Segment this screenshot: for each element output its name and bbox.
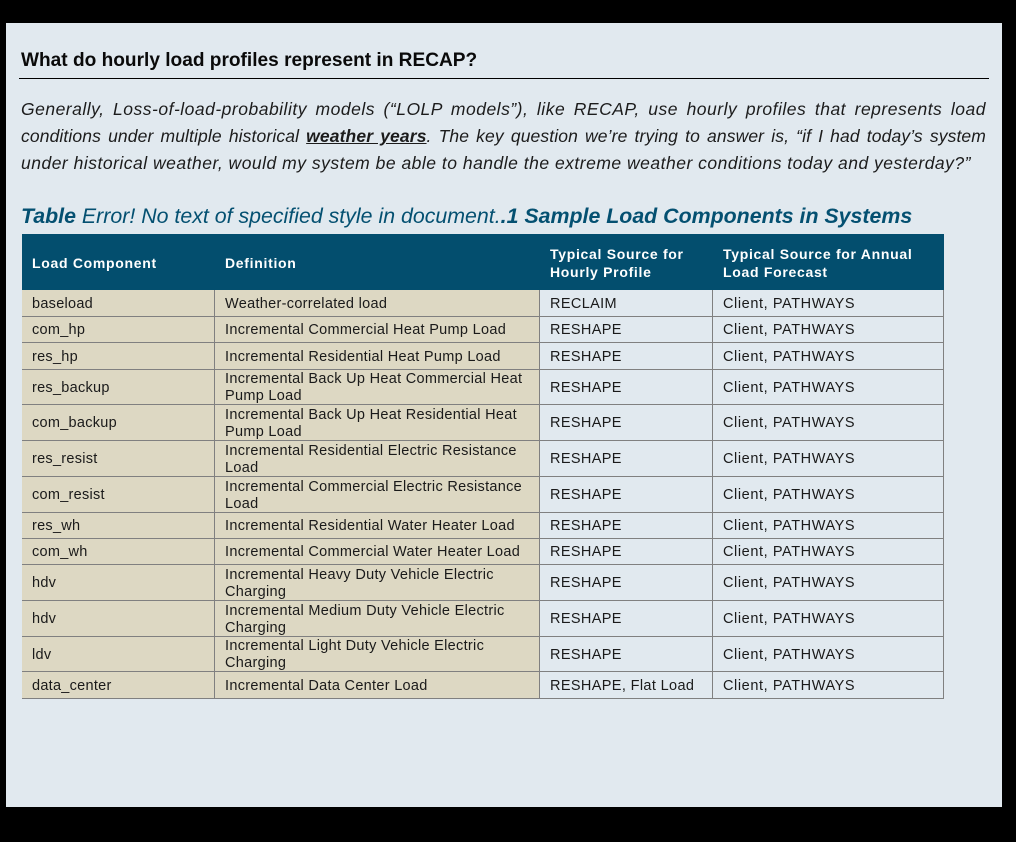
row: res_wh: Client, PATHWAYS [723, 518, 855, 534]
row: com_wh [22, 539, 944, 565]
row: baseload: Weather-correlated load [225, 296, 387, 312]
row: hdv heavy duty: RESHAPE [550, 575, 622, 591]
row: res_resist: RESHAPE [550, 451, 622, 467]
row: res_resist: Incremental Residential Electric Resistance [225, 442, 517, 458]
table caption: Table Error! No text of specified style in document..1 Sample Load Components in Systems [21, 204, 912, 228]
table header row: Definition [225, 255, 297, 271]
row: com_resist: Client, PATHWAYS [723, 487, 855, 503]
text: Generally, Loss-of-load-probability models (“LOLP models”), like RECAP, use hourly profiles that represents load [21, 99, 986, 119]
row: com_hp: com_hp [32, 322, 85, 338]
row: res_hp [22, 343, 944, 370]
row: res_resist: Client, PATHWAYS [723, 451, 855, 467]
row: ldv: Charging [225, 655, 286, 671]
row: res_wh [22, 513, 944, 539]
heading: What do hourly load profiles represent in RECAP? [21, 50, 477, 71]
row: res_wh: RESHAPE [550, 518, 622, 534]
row: ldv [22, 637, 944, 672]
table header row: Typical Source for Annual [723, 246, 912, 262]
row: hdv heavy duty [22, 565, 944, 601]
row: com_resist [22, 477, 944, 513]
row: ldv: RESHAPE [550, 646, 622, 662]
table header row: Load Component [32, 255, 157, 271]
row: hdv heavy duty: Incremental Heavy Duty Vehicle Electric [225, 566, 494, 582]
row: hdv medium duty: hdv [32, 611, 56, 627]
row: hdv heavy duty: Client, PATHWAYS [723, 575, 855, 591]
row: res_backup: Pump Load [225, 388, 302, 404]
row: com_hp: Incremental Commercial Heat Pump Load [225, 322, 506, 338]
row: hdv medium duty [22, 601, 944, 637]
row: com_wh: Client, PATHWAYS [723, 544, 855, 560]
table header row: Load Forecast [723, 264, 828, 280]
row: res_hp: RESHAPE [550, 348, 622, 364]
row: com_hp: RESHAPE [550, 322, 622, 338]
row: res_backup: res_backup [32, 380, 110, 396]
row: res_backup: Incremental Back Up Heat Commercial Heat [225, 371, 522, 387]
row: ldv: Incremental Light Duty Vehicle Electric [225, 638, 484, 654]
row: hdv medium duty: Incremental Medium Duty Vehicle Electric [225, 602, 505, 618]
table header row: Hourly Profile [550, 264, 652, 280]
row: res_backup: Client, PATHWAYS [723, 380, 855, 396]
row: com_backup: Incremental Back Up Heat Residential Heat [225, 406, 517, 422]
row: res_hp: Client, PATHWAYS [723, 348, 855, 364]
row: hdv heavy duty: Charging [225, 584, 286, 600]
table header row [22, 234, 944, 699]
row: data_center: Incremental Data Center Load [225, 678, 428, 694]
row: com_wh: com_wh [32, 544, 88, 560]
row: hdv medium duty: Charging [225, 620, 286, 636]
row: res_backup [22, 370, 944, 405]
row: com_backup: RESHAPE [550, 415, 622, 431]
row: res_backup: RESHAPE [550, 380, 622, 396]
row: ldv: ldv [32, 646, 51, 662]
row: com_wh: RESHAPE [550, 544, 622, 560]
table: sample load components [22, 234, 944, 699]
row: res_wh: res_wh [32, 518, 80, 534]
row: com_backup: com_backup [32, 415, 117, 431]
table header row: Typical Source for [550, 246, 684, 262]
row: data_center: data_center [32, 678, 112, 694]
row: baseload: RECLAIM [550, 296, 617, 312]
text: under historical weather, would my system be able to handle the extreme weather conditions today and yesterday?” [21, 153, 971, 173]
row: data_center: Client, PATHWAYS [723, 678, 855, 694]
row: com_resist: Incremental Commercial Electric Resistance [225, 478, 522, 494]
row: data_center: RESHAPE, Flat Load [550, 678, 694, 694]
row: com_resist: RESHAPE [550, 487, 622, 503]
row: hdv medium duty: RESHAPE [550, 611, 622, 627]
row: res_hp: Incremental Residential Heat Pump Load [225, 348, 501, 364]
row: com_backup: Pump Load [225, 424, 302, 440]
heading rule [19, 78, 989, 79]
row: res_resist [22, 441, 944, 477]
row: data_center [22, 672, 944, 699]
row: hdv medium duty: Client, PATHWAYS [723, 611, 855, 627]
row: hdv heavy duty: hdv [32, 575, 56, 591]
row: com_hp [22, 317, 944, 343]
row: com_resist: Load [225, 496, 258, 512]
row: com_resist: com_resist [32, 487, 105, 503]
row: com_backup: Client, PATHWAYS [723, 415, 855, 431]
row: res_resist: Load [225, 460, 258, 476]
row: res_hp: res_hp [32, 348, 78, 364]
row: com_hp: Client, PATHWAYS [723, 322, 855, 338]
row: ldv: Client, PATHWAYS [723, 646, 855, 662]
text block: introduction paragraph [21, 99, 986, 173]
row: com_backup [22, 405, 944, 441]
row: baseload: Client, PATHWAYS [723, 296, 855, 312]
row: baseload: baseload [32, 296, 93, 312]
row: com_wh: Incremental Commercial Water Heater Load [225, 544, 520, 560]
row: res_wh: Incremental Residential Water Heater Load [225, 518, 515, 534]
row: res_resist: res_resist [32, 451, 98, 467]
text: conditions under multiple historical weather years. The key question we’re trying to answer is, “if I had today’s system [21, 126, 986, 146]
row: baseload [22, 290, 944, 317]
